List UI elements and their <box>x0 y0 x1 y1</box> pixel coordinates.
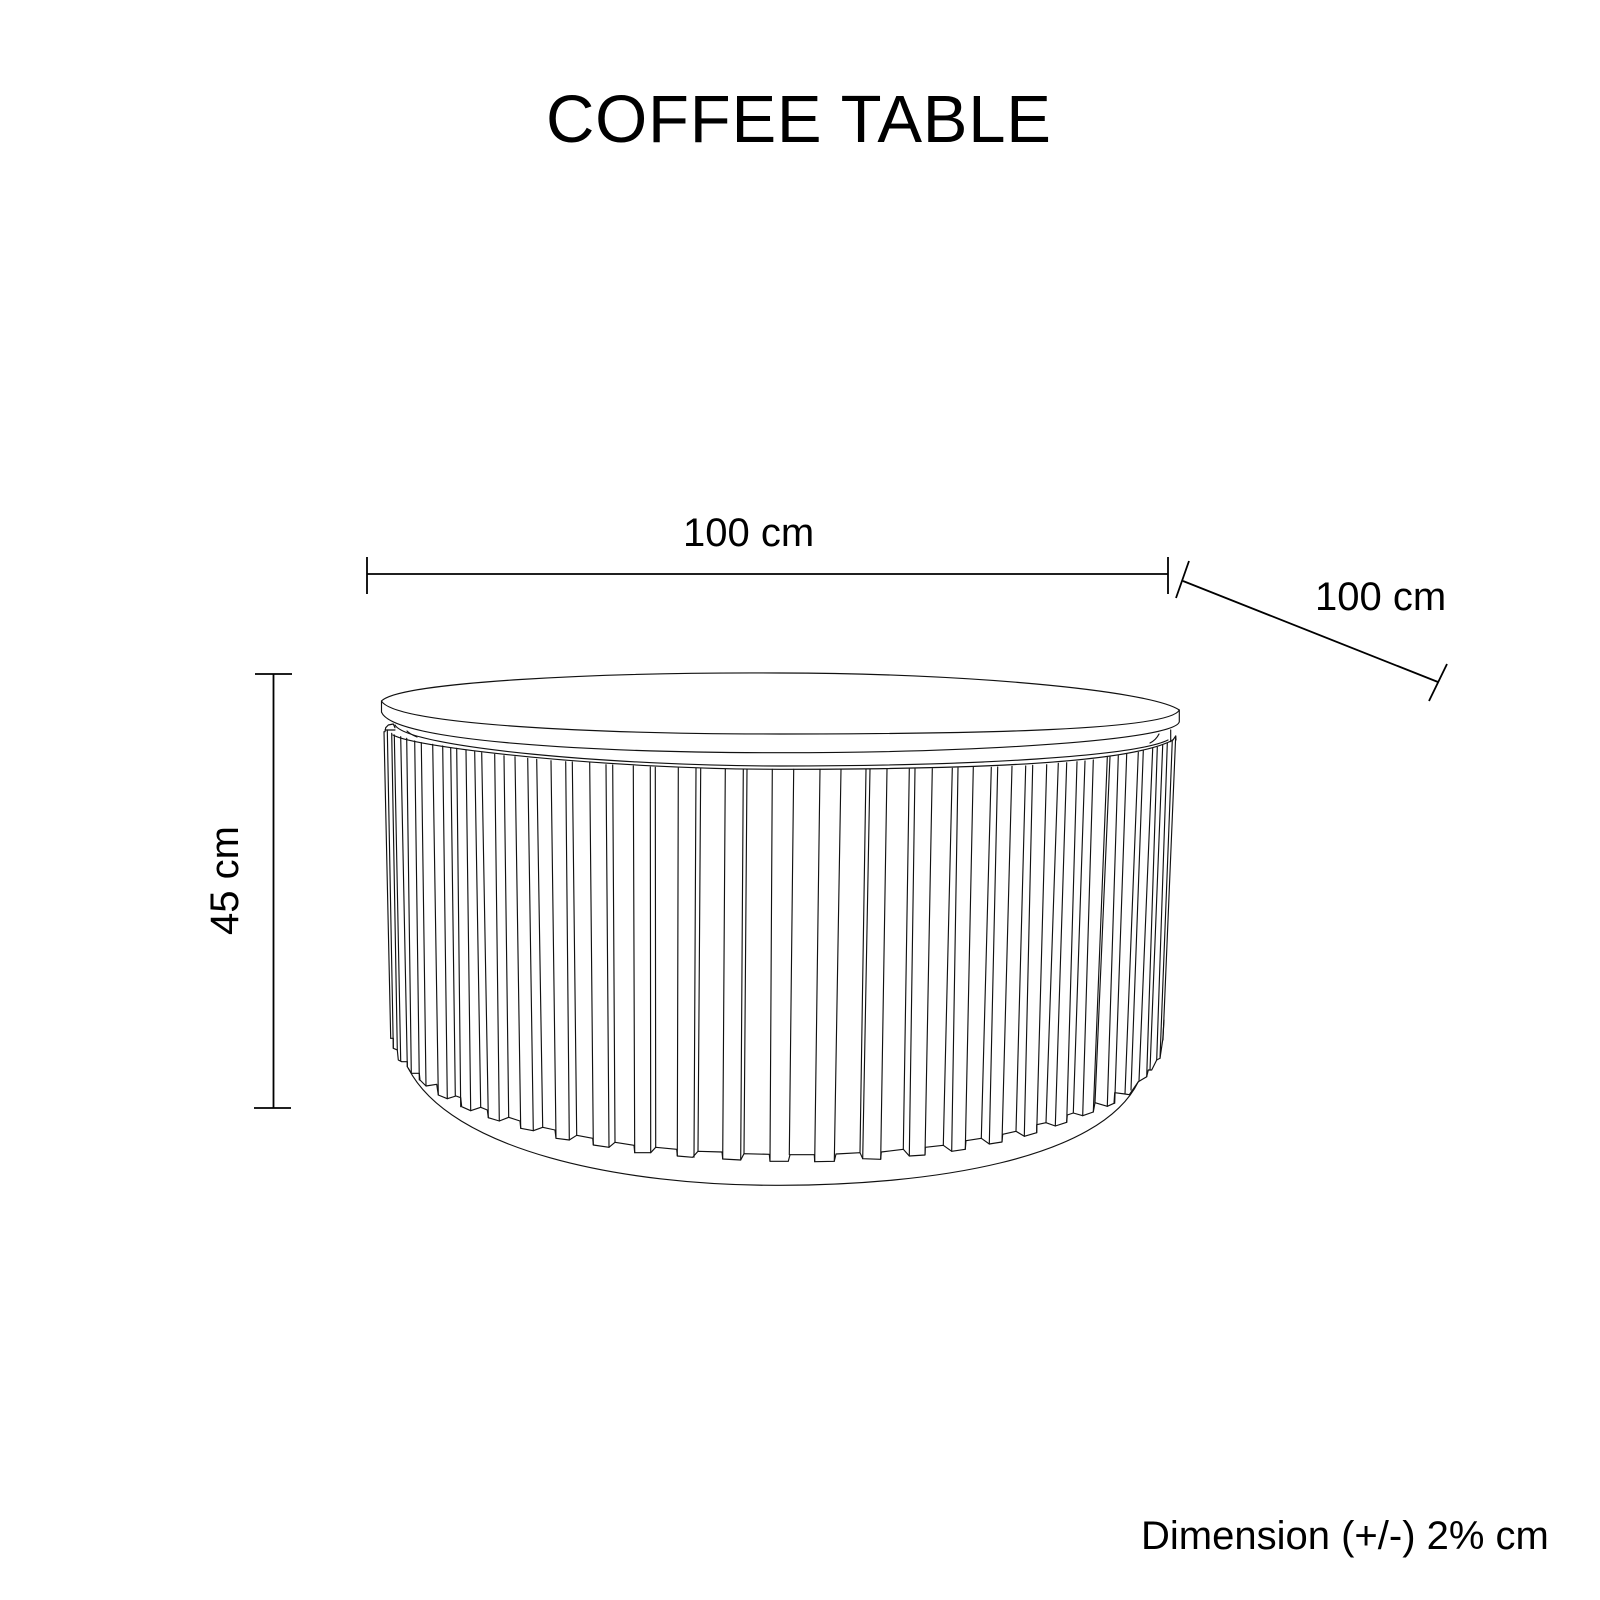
table top edge <box>382 701 1179 753</box>
left cap detail <box>385 724 395 732</box>
fluted slats <box>384 730 1176 1162</box>
depth label: 100 cm <box>1315 575 1446 619</box>
table top surface <box>382 673 1179 734</box>
body top curve <box>393 735 1176 769</box>
height label: 45 cm <box>203 826 247 935</box>
height dimension line <box>254 674 292 1108</box>
depth dimension line <box>1176 561 1447 701</box>
width label: 100 cm <box>683 511 814 555</box>
width dimension line <box>367 557 1168 594</box>
table top edge hooks <box>407 731 1159 743</box>
fluted slat bottoms <box>391 1020 1164 1162</box>
height dimension <box>203 674 292 1108</box>
table drawing <box>382 673 1179 1185</box>
width dimension <box>367 511 1168 594</box>
depth dimension <box>1176 561 1447 701</box>
tolerance note: Dimension (+/-) 2% cm <box>1141 1514 1549 1558</box>
apron line <box>395 725 1171 766</box>
title: COFFEE TABLE <box>546 82 1051 157</box>
base curve <box>408 1068 1138 1185</box>
